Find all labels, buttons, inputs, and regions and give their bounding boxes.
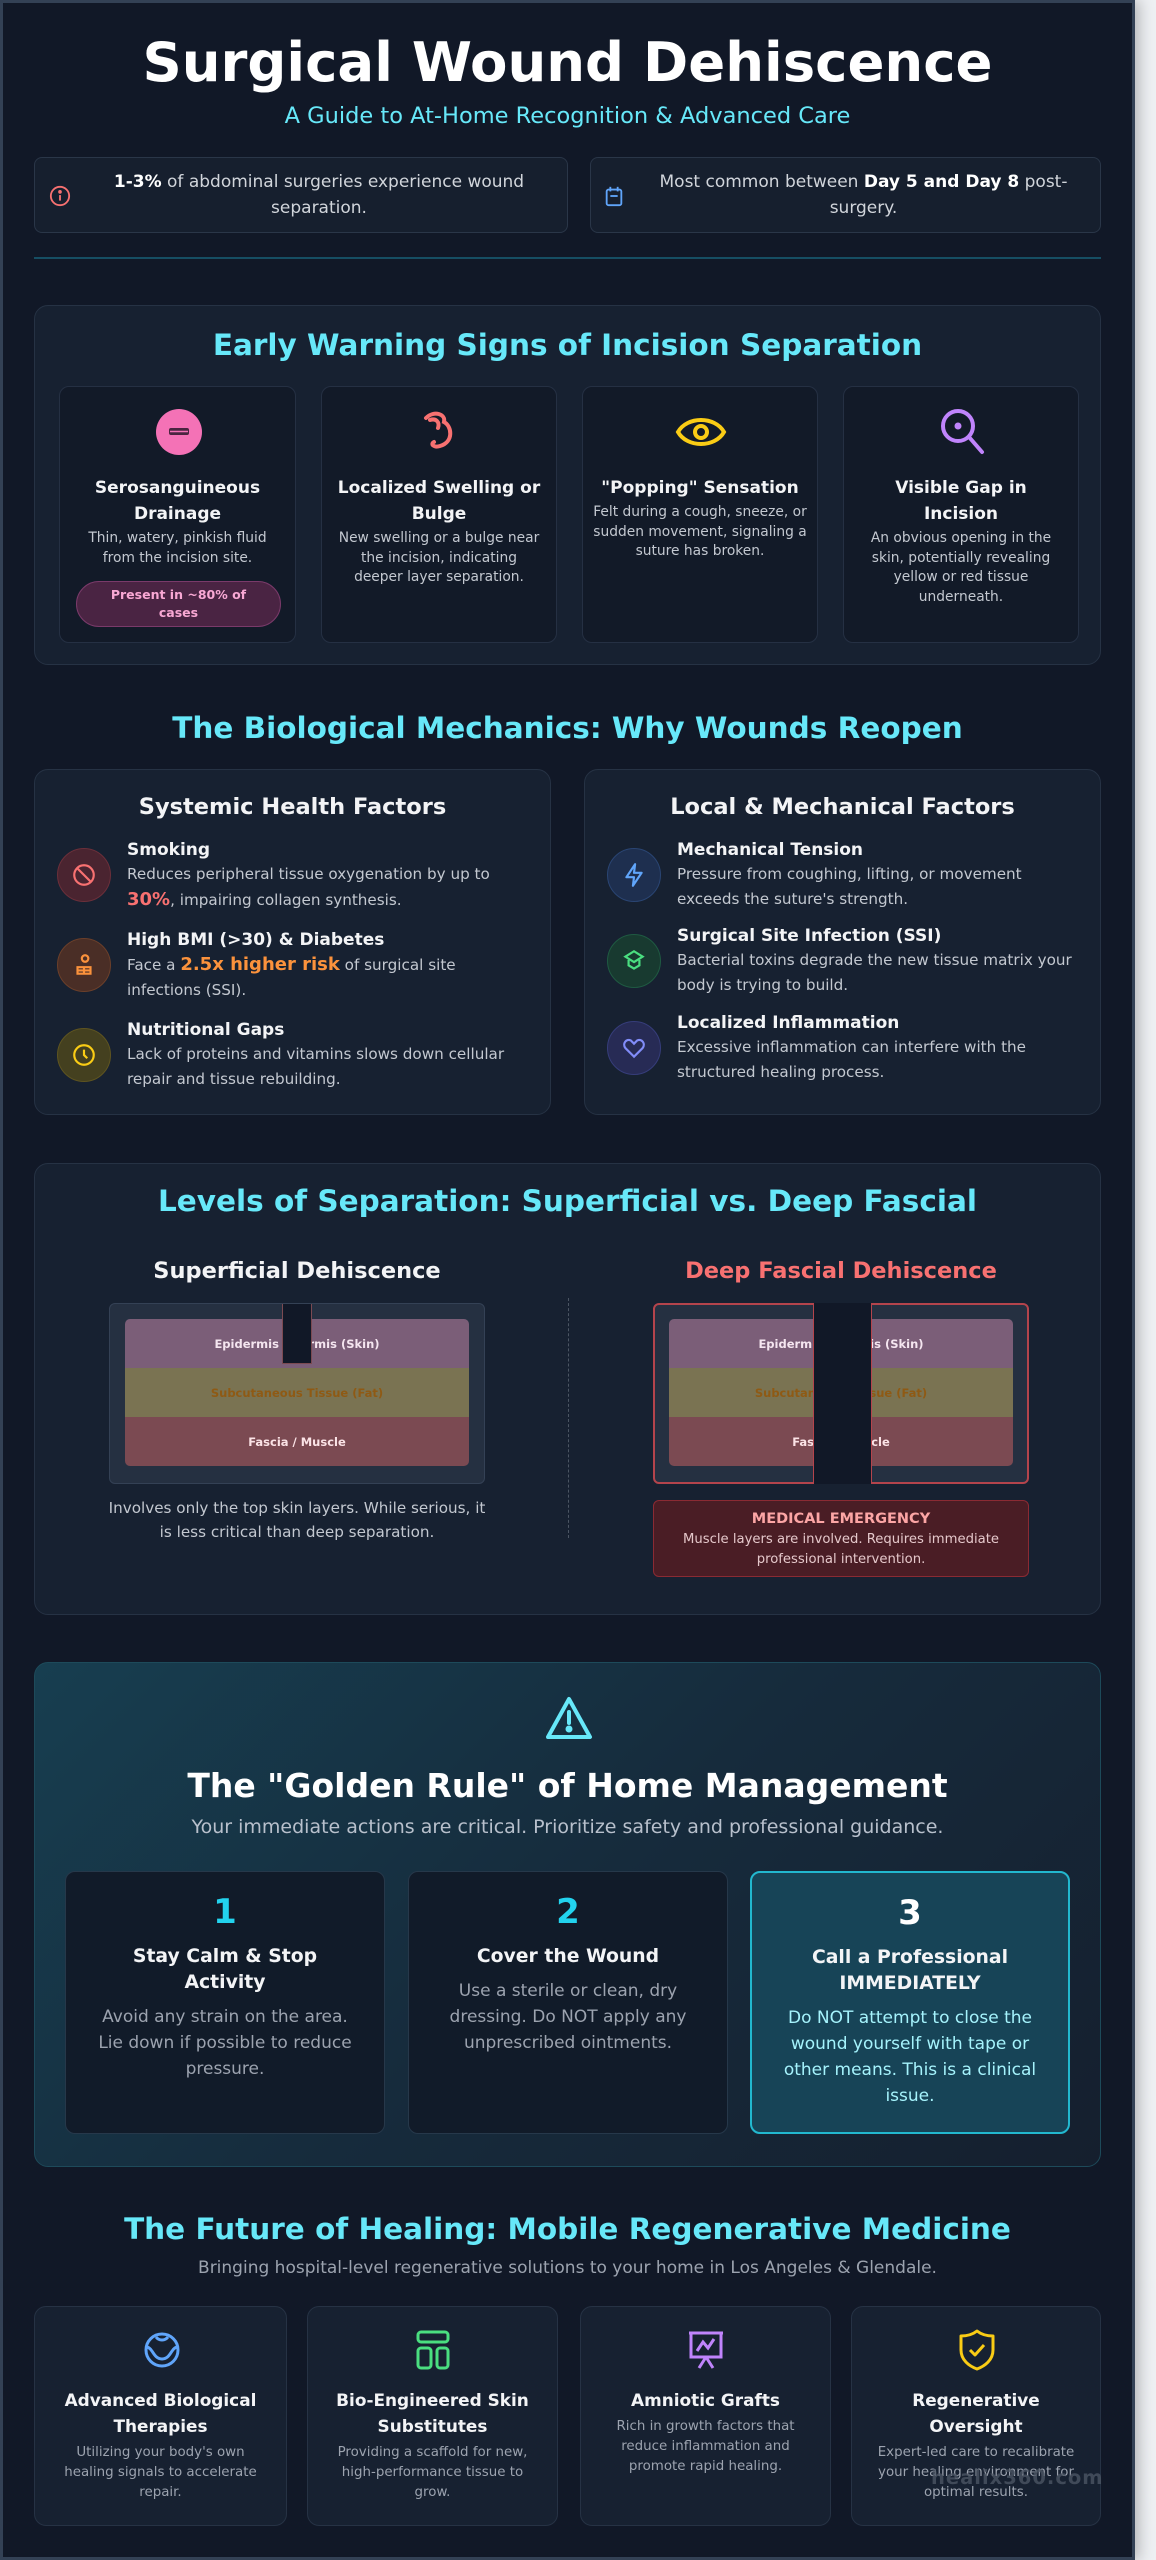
diagram: superficial: Epidermis / Dermis (Skin) xyxy=(214,1336,380,1350)
icon: info xyxy=(50,186,70,206)
item: smoking: Smoking xyxy=(127,840,210,860)
item: infection xyxy=(607,926,1072,994)
icon: brain xyxy=(144,2332,180,2368)
diagram: deep: Subcutaneous Tissue (Fat) xyxy=(755,1386,927,1400)
card: skin substitutes: Providing a scaffold for new, high-performance tissue to grow. xyxy=(338,2445,527,2500)
subtitle: A Guide to At-Home Recognition & Advanced Care xyxy=(285,103,850,129)
card: amniotic grafts: Rich in growth factors that reduce inflammation and promote rapid healing. xyxy=(616,2419,795,2474)
icon: chart board xyxy=(689,2332,723,2369)
badge: 80% xyxy=(76,581,281,627)
text: superficial desc: Involves only the top skin layers. While serious, it is less critical than deep separation. xyxy=(109,1499,485,1541)
diagram: deep: Fascia / Muscle xyxy=(792,1434,890,1448)
icon: shield check xyxy=(960,2330,994,2370)
card: amniotic grafts: Amniotic Grafts xyxy=(631,2390,780,2410)
card: regenerative oversight xyxy=(851,2306,1101,2526)
step 3 xyxy=(750,1871,1070,2134)
card: biological therapies: Advanced Biological Therapies xyxy=(65,2390,256,2436)
stat box: prevalence: 1-3% of abdominal surgeries experience wound separation. xyxy=(114,172,524,218)
icon: layout xyxy=(416,2330,450,2370)
card: skin substitutes xyxy=(307,2306,558,2526)
card: swelling: Localized Swelling or Bulge xyxy=(338,478,540,524)
card: regenerative oversight: Expert-led care to recalibrate your healing environment for optimal results. xyxy=(878,2445,1074,2500)
icon: calendar xyxy=(606,186,622,206)
item: tension xyxy=(607,840,1022,908)
wound gap deep xyxy=(813,1303,872,1484)
diagram: superficial: Fascia / Muscle xyxy=(248,1434,346,1448)
icon: magnifier xyxy=(941,409,984,454)
item: smoking: Reduces peripheral tissue oxygenation by up to 30%, impairing collagen synthesis. xyxy=(127,865,490,910)
heading: systemic: Systemic Health Factors xyxy=(139,794,446,820)
card: popping: Felt during a cough, sneeze, or sudden movement, signaling a suture has broken. xyxy=(593,504,807,559)
panel: golden rule xyxy=(34,1662,1101,2167)
card: drainage: Serosanguineous Drainage xyxy=(95,478,260,524)
heading: golden rule: The "Golden Rule" of Home Management xyxy=(187,1766,948,1805)
step 2: Use a sterile or clean, dry dressing. Do NOT apply any unprescribed ointments. xyxy=(450,1981,686,2053)
item: inflammation: Localized Inflammation xyxy=(677,1013,899,1033)
card: visible gap xyxy=(843,386,1079,643)
icon: no xyxy=(57,848,111,902)
card: swelling xyxy=(321,386,557,643)
wound gap shallow xyxy=(282,1304,312,1364)
stat box: timing: Most common between Day 5 and Day 8 post-surgery. xyxy=(660,172,1067,218)
watermark: healix360.com xyxy=(931,2466,1104,2489)
item: smoking xyxy=(57,840,490,910)
icon: bolt xyxy=(607,848,661,902)
heading: early warning: Early Warning Signs of Incision Separation xyxy=(213,328,922,362)
card: amniotic grafts xyxy=(580,2306,831,2526)
item: bmi diabetes xyxy=(57,930,456,999)
diagram: deep xyxy=(653,1303,1029,1484)
item: infection: Bacterial toxins degrade the new tissue matrix your body is trying to build. xyxy=(677,951,1072,994)
card: visible gap: An obvious opening in the skin, potentially revealing yellow or red tissue underneath. xyxy=(871,530,1051,604)
icon: person xyxy=(57,938,111,992)
step 1: 1 xyxy=(213,1892,237,1932)
icon: warning xyxy=(546,1696,592,1739)
step 1 xyxy=(65,1871,385,2134)
card: drainage: Thin, watery, pinkish fluid from the incision site. xyxy=(88,530,267,566)
heading: future of healing: The Future of Healing: Mobile Regenerative Medicine xyxy=(124,2212,1011,2246)
callout: medical emergency: Muscle layers are involved. Requires immediate professional intervention. xyxy=(683,1532,999,1567)
step 1: Stay Calm & Stop Activity xyxy=(133,1946,317,1993)
stat box: prevalence xyxy=(34,157,568,233)
panel: levels of separation xyxy=(34,1163,1101,1615)
item: nutrition: Lack of proteins and vitamins slows down cellular repair and tissue rebuilding. xyxy=(127,1045,504,1088)
icon: heart xyxy=(607,1021,661,1075)
heading: biological mechanics: The Biological Mechanics: Why Wounds Reopen xyxy=(172,711,963,745)
callout: medical emergency xyxy=(653,1500,1029,1577)
card: popping: "Popping" Sensation xyxy=(601,478,799,498)
item: tension: Mechanical Tension xyxy=(677,840,863,860)
step 2: Cover the Wound xyxy=(477,1946,659,1967)
panel: local mechanical factors xyxy=(584,769,1101,1115)
item: tension: Pressure from coughing, lifting, or movement exceeds the suture's strength. xyxy=(677,865,1022,908)
badge: 80%: Present in ~80% of cases xyxy=(111,587,246,620)
step 3: 3 xyxy=(898,1893,922,1933)
callout: medical emergency: MEDICAL EMERGENCY xyxy=(752,1511,930,1527)
card: swelling: New swelling or a bulge near the incision, indicating deeper layer separation. xyxy=(339,530,539,585)
step 2 xyxy=(408,1871,728,2134)
icon: bulge xyxy=(424,412,452,449)
panel: systemic health factors xyxy=(34,769,551,1115)
item: nutrition: Nutritional Gaps xyxy=(127,1020,284,1040)
card: regenerative oversight: Regenerative Oversight xyxy=(912,2390,1040,2436)
item: nutrition xyxy=(57,1020,504,1088)
item: inflammation xyxy=(607,1013,1026,1081)
card: biological therapies xyxy=(34,2306,287,2526)
heading: local: Local & Mechanical Factors xyxy=(670,794,1015,820)
stat box: timing xyxy=(590,157,1101,233)
card: visible gap: Visible Gap in Incision xyxy=(895,478,1027,524)
subtitle: future: Bringing hospital-level regenerative solutions to your home in Los Angeles & Glendale. xyxy=(198,2258,937,2278)
diagram: superficial xyxy=(109,1303,485,1484)
item: infection: Surgical Site Infection (SSI) xyxy=(677,926,941,946)
icon: clock xyxy=(57,1028,111,1082)
panel: early warning signs xyxy=(34,305,1101,665)
step 2: 2 xyxy=(556,1892,580,1932)
icon: eye xyxy=(676,418,726,446)
subtitle: golden rule: Your immediate actions are critical. Prioritize safety and professional guidance. xyxy=(192,1816,943,1838)
diagram: deep: Epidermis / Dermis (Skin) xyxy=(758,1336,924,1350)
heading: deep: Deep Fascial Dehiscence xyxy=(685,1258,997,1284)
step 1: Avoid any strain on the area. Lie down if possible to reduce pressure. xyxy=(98,2007,352,2079)
icon: drop xyxy=(156,409,202,455)
step 3: Do NOT attempt to close the wound yourself with tape or other means. This is a clinical issue. xyxy=(784,2008,1036,2106)
heading: superficial: Superficial Dehiscence xyxy=(153,1258,441,1284)
title: Surgical Wound Dehiscence xyxy=(142,30,993,94)
icon: germ xyxy=(607,934,661,988)
heading: levels: Levels of Separation: Superficial vs. Deep Fascial xyxy=(158,1184,977,1218)
item: bmi diabetes: High BMI (>30) & Diabetes xyxy=(127,930,384,950)
diagram: superficial: Subcutaneous Tissue (Fat) xyxy=(211,1386,383,1400)
card: drainage xyxy=(59,386,296,643)
card: popping xyxy=(582,386,818,643)
step 3: Call a Professional IMMEDIATELY xyxy=(812,1947,1008,1994)
card: biological therapies: Utilizing your body's own healing signals to accelerate repair. xyxy=(64,2445,257,2500)
item: inflammation: Excessive inflammation can interfere with the structured healing process. xyxy=(677,1038,1026,1081)
item: bmi diabetes: Face a 2.5x higher risk of surgical site infections (SSI). xyxy=(127,954,456,999)
card: skin substitutes: Bio-Engineered Skin Substitutes xyxy=(336,2390,529,2436)
